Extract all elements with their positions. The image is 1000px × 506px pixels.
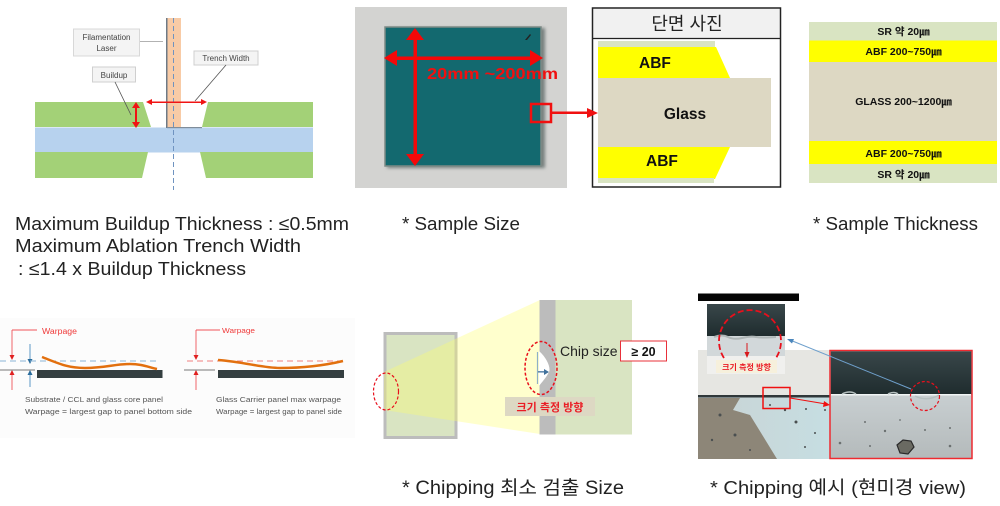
crop marker: [531, 104, 551, 122]
panel: layer thickness stack: ABF 200~750㎛: [865, 148, 942, 160]
panel: sample photo: [355, 7, 567, 188]
panel: cross section: ABF: [646, 153, 678, 170]
size label: 20mm ~200mm: [427, 66, 558, 83]
caption: sample thickness: * Sample Thickness: [813, 213, 978, 234]
zoomed photo: [830, 350, 972, 458]
blue leader arrow: [787, 339, 911, 389]
panel: cross section: ABF: [639, 55, 671, 72]
laser beam: [167, 18, 181, 127]
warpage diagram: core panel: [0, 327, 192, 416]
label: trench width: Trench Width: [202, 54, 250, 63]
heading: [594, 9, 780, 38]
panel: layer thickness stack: GLASS 200~1200㎛: [855, 96, 952, 108]
text block: buildup limits: Maximum Ablation Trench Width: [15, 235, 301, 256]
arrow: marker to zoom: [790, 398, 830, 407]
arrow: sample width: [384, 50, 543, 66]
arrow: sample height: [406, 28, 424, 166]
label: buildup: Buildup: [101, 71, 128, 80]
chip size box: [620, 341, 666, 361]
measure arrow: [538, 369, 549, 375]
warpage diagram: carrier panel: Glass Carrier panel max warpage: [216, 397, 341, 404]
chip size label: Chip size: [560, 343, 618, 359]
ABF top layer: [809, 40, 997, 62]
bottom left buildup: [35, 152, 148, 178]
red ellipse: enlarged: [525, 342, 557, 394]
SR top: [598, 41, 715, 47]
warpage diagram: core panel: Substrate / CCL and glass core panel: [25, 397, 164, 404]
label: buildup: [92, 67, 136, 115]
panel: filamentation laser diagram: [35, 18, 313, 190]
label: trench width: [194, 51, 258, 101]
full panel outline: [385, 334, 456, 438]
glass layer: [809, 62, 997, 141]
warpage diagram: carrier panel: Warpage = largest gap to panel side: [216, 409, 342, 416]
text block: buildup limits: Maximum Buildup Thickness : ≤0.5mm: [15, 213, 349, 234]
panel: layer thickness stack: SR 약 20㎛: [877, 25, 930, 38]
top right buildup: [202, 102, 313, 127]
panel: warpage diagrams: [0, 318, 355, 438]
panel: cross section: 단면 사진: [651, 10, 723, 36]
enlarged panel: [556, 300, 632, 434]
text block: buildup limits: : ≤1.4 x Buildup Thickness: [18, 258, 246, 279]
warpage diagram: carrier panel: Warpage: [222, 326, 255, 335]
panel: layer thickness stack: ABF 200~750㎛: [865, 46, 942, 58]
SR top layer: [809, 22, 997, 40]
arrow: trench width: [146, 99, 207, 105]
arrow: buildup thickness: [132, 102, 140, 128]
main microscope photo: [698, 350, 830, 459]
chip size box: ≥ 20: [631, 345, 656, 359]
inset photo: [707, 304, 785, 374]
glass core: [35, 128, 313, 152]
inset label: 크기 측정 방향: [722, 362, 771, 373]
measurement direction label: [505, 397, 595, 416]
panel: chipping microscope example: [698, 294, 972, 459]
red marker on main photo: [763, 388, 790, 408]
panel: layer thickness stack: [809, 22, 997, 183]
SR bottom: [598, 178, 714, 183]
ABF bottom layer: [809, 141, 997, 164]
text block: buildup limits: [15, 213, 349, 279]
black redaction bar: [698, 294, 799, 301]
panel: cross section: Glass: [664, 106, 706, 123]
glass: [598, 78, 771, 147]
ABF top: [598, 47, 730, 78]
teal sample: [385, 27, 541, 166]
magnification cone: [384, 300, 540, 434]
inset dashed circle: [719, 310, 781, 358]
chip notch: [539, 351, 550, 386]
label: filamentation laser: Filamentation: [82, 33, 131, 42]
bottom right buildup: [200, 152, 313, 178]
panel: cross section: [592, 8, 781, 187]
measurement direction label: 크기 측정 방향: [517, 399, 583, 415]
inset label: [716, 360, 777, 373]
panel: layer thickness stack: SR 약 20㎛: [877, 168, 930, 181]
caption: chipping detection size: * Chipping 최소 검출 Size: [402, 477, 624, 499]
SR bottom layer: [809, 164, 997, 183]
warpage diagram: core panel: Warpage: [42, 327, 78, 336]
caption: chipping microscope example: * Chipping 예시 (현미경 view): [710, 477, 966, 498]
inset arrow: [744, 343, 750, 358]
ABF bottom: [598, 147, 730, 179]
zoom dashed circle: [910, 382, 940, 410]
arrow: crop to cross section: [552, 108, 598, 118]
panel: chipping minimum detection: [374, 300, 666, 438]
chip edge strip: [540, 300, 556, 434]
red ellipse: source: [374, 373, 398, 410]
caption: sample size: * Sample Size: [402, 213, 520, 234]
warpage diagram: carrier panel: [184, 326, 344, 416]
top left buildup: [35, 102, 151, 127]
warpage diagram: core panel: Warpage = largest gap to panel bottom side: [25, 409, 192, 416]
label: filamentation laser: Laser: [96, 44, 117, 53]
label: filamentation laser: [74, 29, 163, 56]
